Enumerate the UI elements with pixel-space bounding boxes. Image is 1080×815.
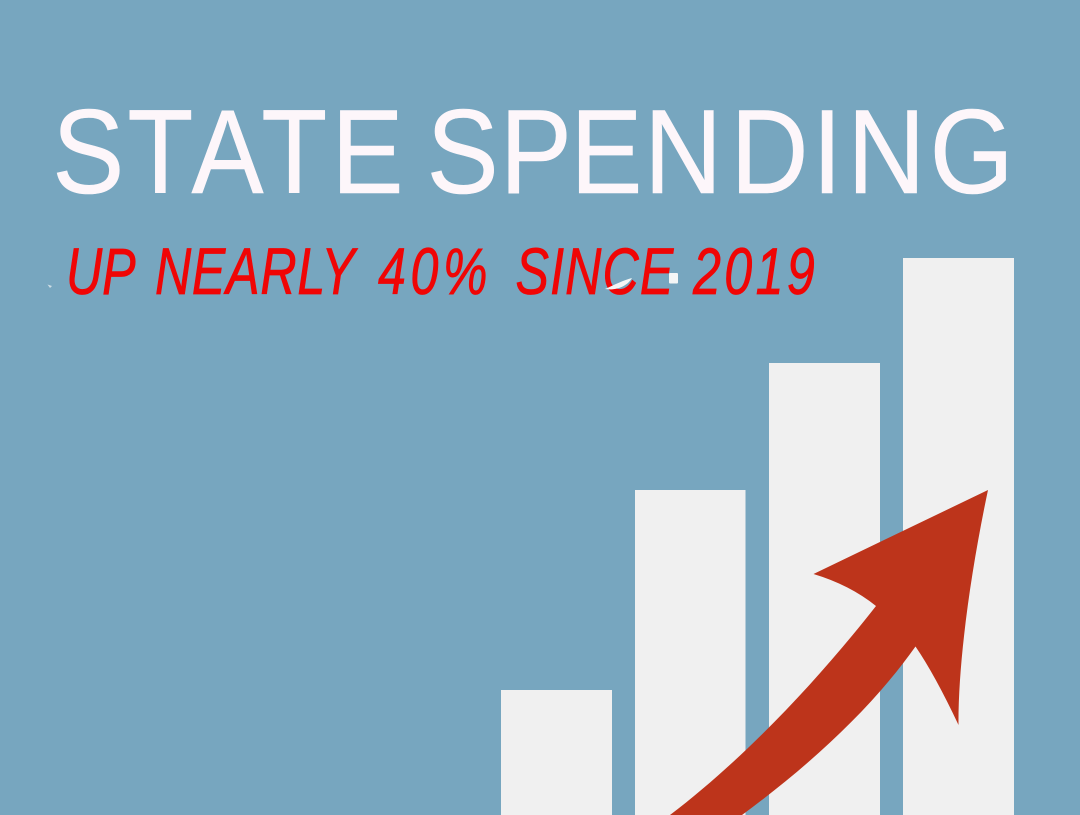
subtitle: 2019 (692, 235, 818, 309)
subtitle: UP (66, 235, 136, 309)
bars (501, 258, 1014, 815)
subtitle: NEARLY (155, 235, 358, 309)
subtitle: SINCE (516, 235, 674, 309)
icon: rising arrow (670, 490, 988, 815)
title: STATE SPENDING (52, 86, 1014, 219)
white specks (48, 273, 678, 289)
subtitle: 40% (378, 235, 492, 309)
